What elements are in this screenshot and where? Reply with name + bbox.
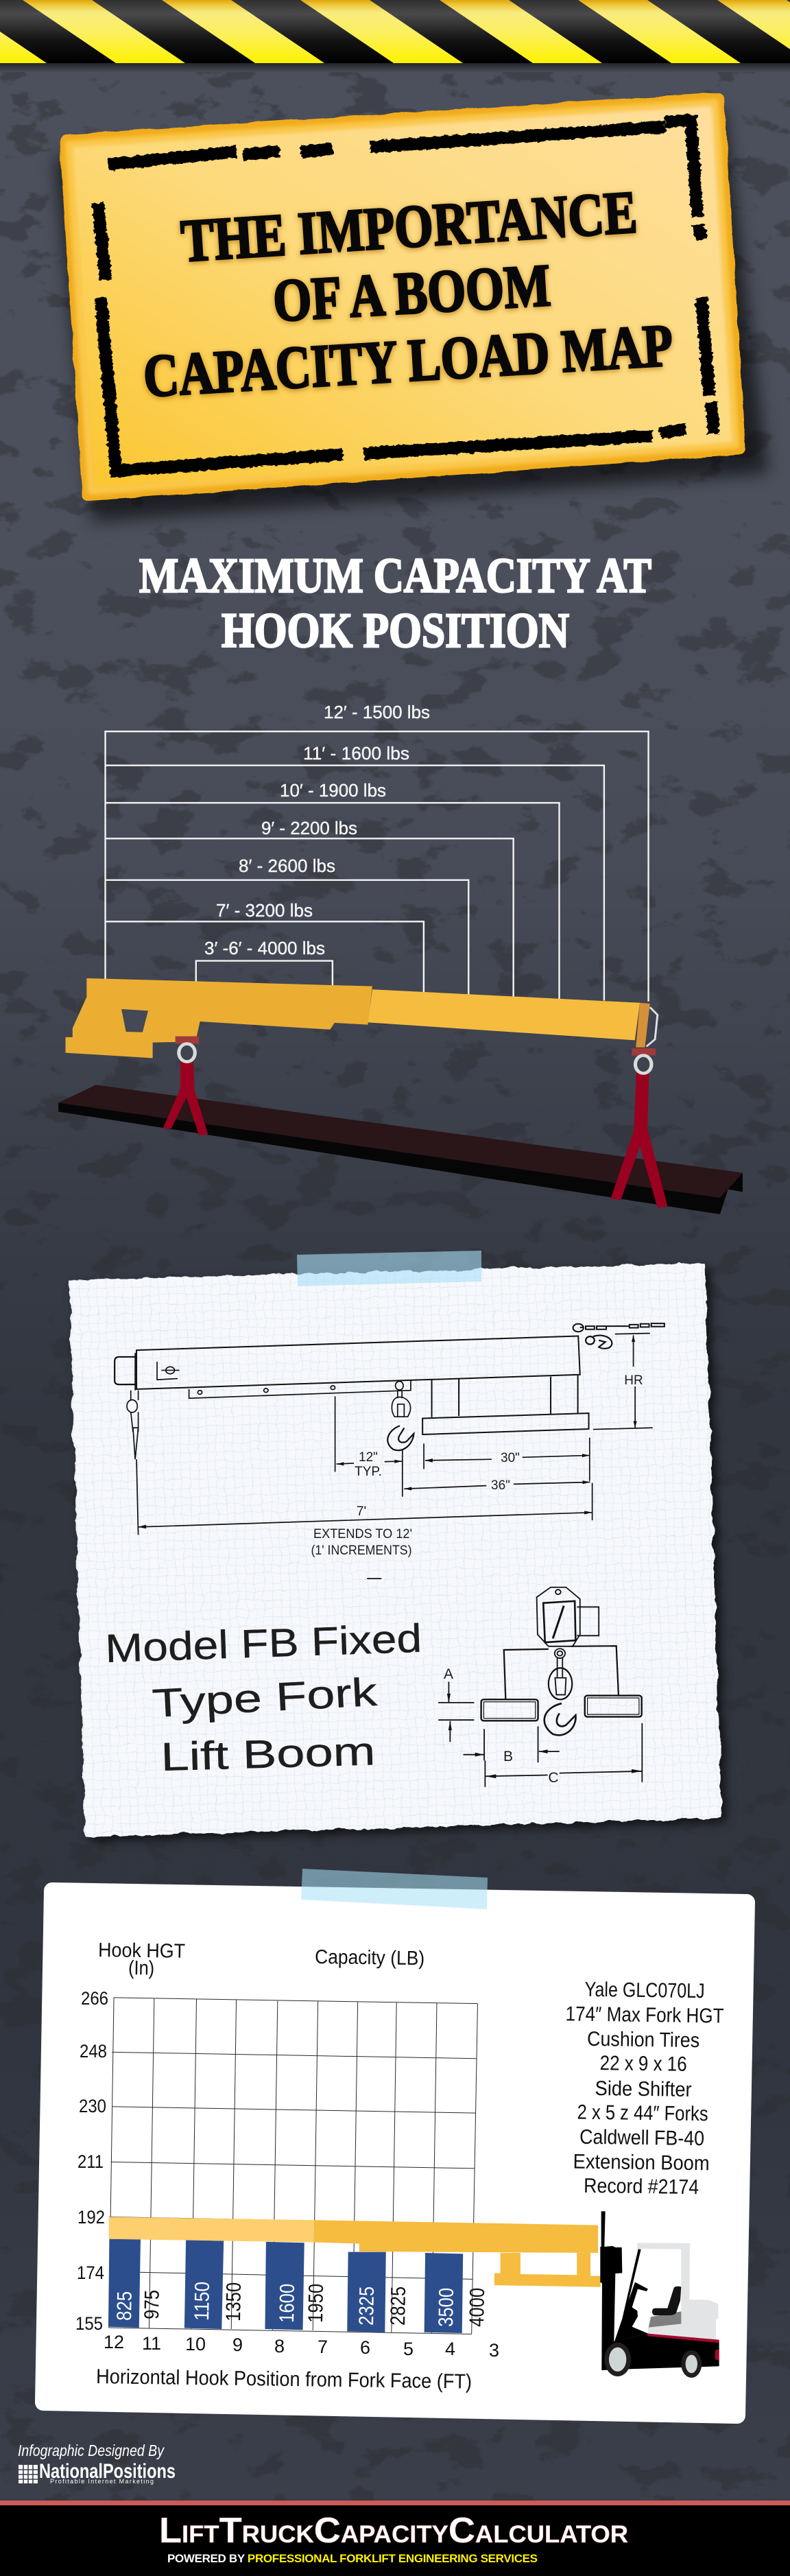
title text: THE IMPORTANCE [179, 179, 639, 275]
designer credit: Infographic Designed By [18, 2442, 165, 2459]
arrowheads [139, 1335, 642, 1778]
dimension labels: EXTENDS TO 12' [313, 1527, 412, 1541]
forklift specs: Caldwell FB-40 [579, 2126, 704, 2150]
capacity values: 825 [113, 2291, 136, 2321]
chart grid [109, 1998, 477, 2334]
heading: maximum capacity at hook position [139, 548, 651, 658]
axis labels: 230 [79, 2096, 106, 2116]
title text: OF A BOOM [272, 252, 552, 335]
icon: forklift [600, 2211, 719, 2378]
boom front view drawing [438, 1587, 643, 1787]
axis labels: 10 [185, 2334, 206, 2354]
axis labels: Hook HGT [98, 1939, 186, 1963]
boom overlay [109, 2217, 601, 2287]
capacity labels: 12′ - 1500 lbs [324, 702, 430, 722]
axis labels: 7 [318, 2337, 328, 2357]
axis labels: 12 [104, 2332, 124, 2352]
axis labels: 9 [232, 2335, 243, 2355]
handwritten model caption [104, 1616, 422, 1780]
axis labels: 5 [403, 2339, 414, 2359]
dimension labels: HR [624, 1373, 643, 1388]
capacity labels: 3′ -6′ - 4000 lbs [204, 938, 325, 958]
dimension labels: TYP. [355, 1465, 382, 1479]
boom side view drawing [115, 1323, 665, 1579]
capacity values: 975 [141, 2290, 164, 2319]
capacity values: 1150 [191, 2282, 214, 2321]
heading: maximum capacity at hook position: MAXIMUM CAPACITY AT [139, 548, 651, 603]
dimension labels: (1' INCREMENTS) [311, 1544, 411, 1558]
capacity labels: 9′ - 2200 lbs [261, 818, 357, 838]
axis labels: 155 [75, 2313, 103, 2334]
forklift specs: Record #2174 [584, 2175, 699, 2199]
tape [301, 1869, 488, 1909]
forklift specs [565, 1978, 724, 2199]
dimension labels: 7' [357, 1504, 366, 1519]
capacity labels [204, 702, 430, 958]
title text [141, 179, 675, 410]
capacity values: 1600 [276, 2284, 299, 2323]
capacity labels: 10′ - 1900 lbs [280, 780, 386, 801]
forklift specs: 174″ Max Fork HGT [565, 2002, 724, 2028]
handwritten model caption: Lift Boom [160, 1729, 376, 1780]
axis labels: 248 [80, 2041, 107, 2061]
axis labels: 8 [274, 2336, 285, 2356]
panel: technical drawing on graph paper [69, 1251, 721, 1837]
dimension labels: A [444, 1666, 453, 1682]
forklift specs: Extension Boom [573, 2151, 710, 2175]
panel: title sign [55, 99, 768, 521]
designer credit: Profitable Internet Marketing [50, 2478, 154, 2485]
capacity labels: 11′ - 1600 lbs [303, 743, 409, 764]
dimension brackets [106, 731, 649, 1002]
capacity values: 4000 [466, 2288, 489, 2327]
dimension labels: B [503, 1749, 513, 1764]
forklift specs: Cushion Tires [587, 2028, 699, 2052]
axis labels: 4 [445, 2339, 455, 2359]
panel: load map chart card [43, 1869, 747, 2415]
title text: CAPACITY LOAD MAP [141, 312, 675, 410]
boom [66, 978, 658, 1058]
forklift specs: 2 x 5 z 44″ Forks [577, 2101, 708, 2125]
capacity values: 2325 [355, 2287, 379, 2326]
footer tagline: POWERED BY PROFESSIONAL FORKLIFT ENGINEERING SERVICES [167, 2552, 538, 2565]
dimension labels [311, 1373, 643, 1786]
capacity values: 1950 [304, 2284, 328, 2323]
forklift specs: Side Shifter [595, 2077, 692, 2101]
handwritten model caption: Type Fork [151, 1670, 379, 1726]
hazard stripe banner [0, 0, 790, 72]
capacity values [113, 2282, 489, 2327]
capacity values: 3500 [435, 2288, 458, 2327]
axis labels: 266 [81, 1988, 108, 2009]
capacity values: 2825 [387, 2287, 410, 2326]
capacity labels: 7′ - 3200 lbs [216, 900, 313, 921]
axis labels: 174 [77, 2262, 104, 2283]
handwritten model caption: Model FB Fixed [104, 1616, 422, 1671]
fork beam [58, 1085, 743, 1214]
footer brand title: LIFTTRUCKCAPACITYCALCULATOR [159, 2511, 628, 2551]
lifting straps [163, 1037, 667, 1207]
forklift specs: Yale GLC070LJ [584, 1978, 705, 2002]
capacity values: 1350 [222, 2282, 246, 2321]
capacity labels: 8′ - 2600 lbs [239, 855, 335, 876]
axis labels: 211 [77, 2151, 104, 2172]
axis labels [75, 1939, 499, 2394]
footer bar [0, 2501, 790, 2576]
icon: national positions logo [19, 2465, 38, 2483]
capacity bars [108, 2239, 463, 2333]
axis labels: Capacity (LB) [315, 1946, 424, 1970]
distressed stencil border [98, 121, 713, 471]
axis labels: 192 [77, 2207, 105, 2228]
axis labels: 3 [489, 2340, 499, 2361]
axis labels: 11 [142, 2333, 161, 2354]
designer credit [18, 2442, 176, 2485]
heading: maximum capacity at hook position: HOOK POSITION [222, 603, 569, 658]
axis labels: Horizontal Hook Position from Fork Face (FT) [96, 2365, 472, 2394]
dimension labels: 30" [501, 1451, 520, 1465]
tape [297, 1251, 481, 1286]
panel: boom capacity diagram [58, 702, 743, 1214]
axis labels: 6 [360, 2337, 370, 2358]
forklift specs: 22 x 9 x 16 [599, 2052, 687, 2076]
axis labels: (In) [128, 1957, 154, 1980]
dimension labels: C [548, 1770, 559, 1786]
dimension labels: 36" [491, 1478, 510, 1493]
dimension labels: 12" [359, 1450, 378, 1465]
designer credit: NationalPositions [39, 2460, 176, 2483]
